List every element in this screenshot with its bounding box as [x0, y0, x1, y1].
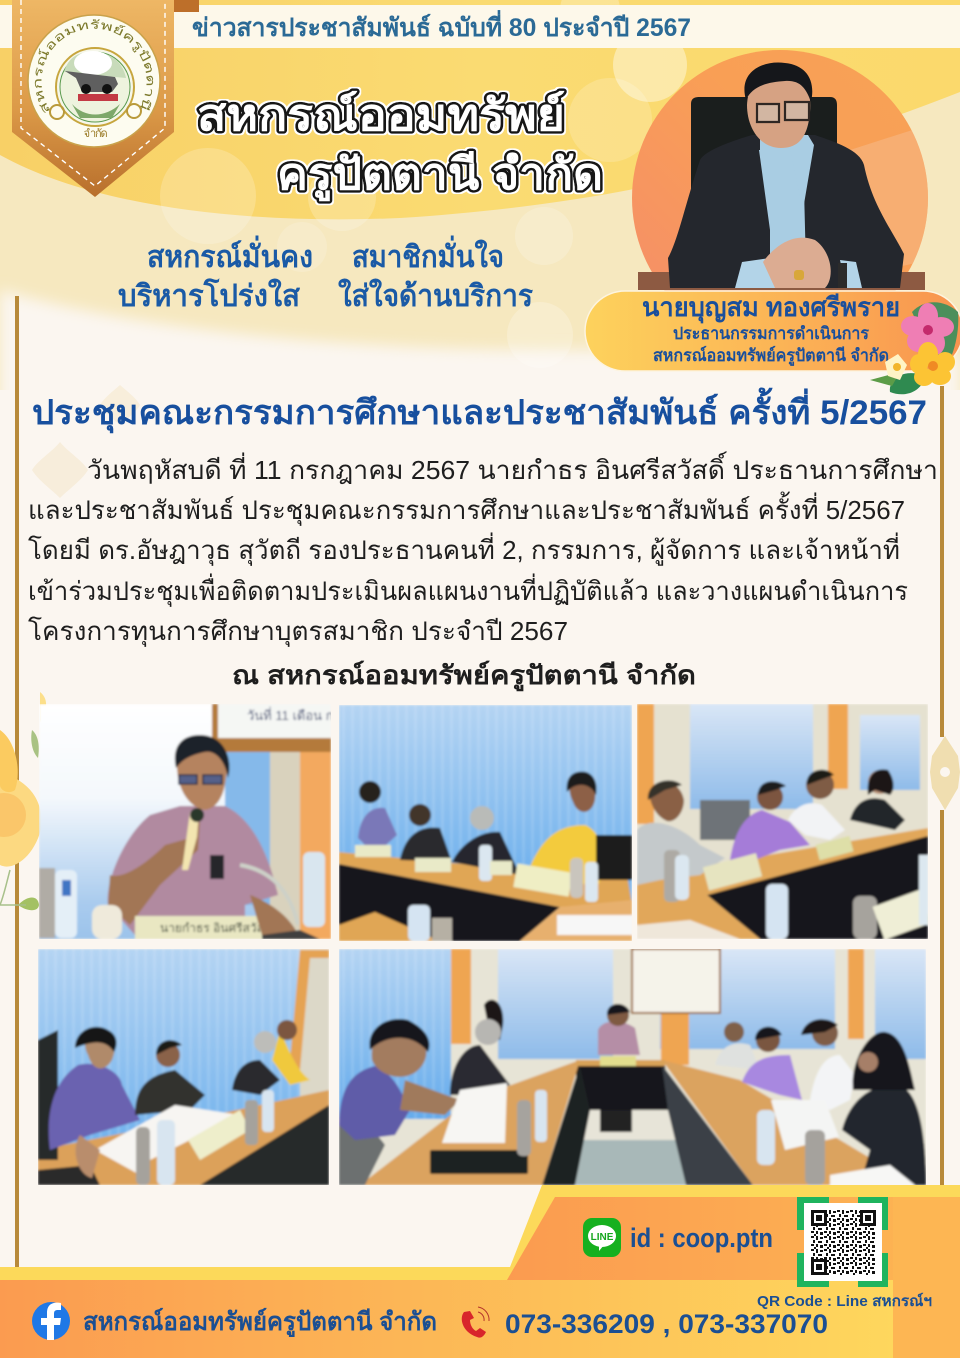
footer: yellow and orange background [0, 1185, 960, 1358]
photo 1: speaker with microphone [39, 704, 341, 939]
slogans [118, 235, 533, 313]
photo 1: speaker with microphone: วันที่ 11 เดือน กร [247, 707, 341, 723]
title: cooperative name: ครูปัตตานี จำกัด [277, 150, 603, 201]
QR caption: QR Code : Line สหกรณ์ฯ [757, 1292, 932, 1310]
body paragraph: เข้าร่วมประชุมเพื่อติดตามประเมินผลแผนงานที่ปฏิบัติแล้ว และวางแผนดำเนินการ [28, 573, 908, 607]
icon: LINE app: LINE [591, 1232, 614, 1243]
chairman name plate [585, 291, 960, 371]
chairman name plate: สหกรณ์ออมทรัพย์ครูปัตตานี จำกัด [653, 345, 889, 367]
photo 4: members reading documents [38, 949, 329, 1185]
slogans: ใส่ใจด้านบริการ [338, 278, 533, 313]
telephone numbers: 073-336209 , 073-337070 [505, 1309, 828, 1339]
icon: Facebook [32, 1302, 70, 1340]
icon: LINE app [583, 1218, 621, 1257]
photo 3: committee members at table right [637, 704, 932, 940]
chairman portrait [632, 50, 928, 290]
title: cooperative name [197, 90, 603, 201]
slogans: สมาชิกมั่นใจ [352, 235, 504, 274]
ribbon with cooperative logo [12, 0, 199, 197]
chairman name plate: นายบุญสม ทองศรีพราย [642, 292, 900, 324]
slogans: สหกรณ์มั่นคง [147, 235, 313, 274]
LINE id: id : coop.ptn [630, 1223, 773, 1253]
heading: meeting title: ประชุมคณะกรรมการศึกษาและประชาสัมพันธ์ ครั้งที่ 5/2567 [32, 387, 927, 434]
decoration: gold ornament right [930, 736, 960, 810]
slogans: บริหารโปร่งใส [118, 277, 301, 313]
decoration: yellow flower and leaves left [0, 692, 46, 910]
right frame line [940, 386, 944, 1267]
body paragraph: โครงการทุนการศึกษาบุตรสมาชิก ประจำปี 2567 [28, 616, 568, 647]
photo 2: committee members at table [339, 705, 632, 941]
body paragraph [28, 451, 938, 692]
top band: newsletter issue: ข่าวสารประชาสัมพันธ์ ฉบับที่ 80 ประจำปี 2567 [192, 10, 691, 42]
logo seal [27, 14, 161, 148]
logo seal: สหกรณ์ออมทรัพย์ครูปัตตานี [34, 19, 154, 113]
body paragraph: และประชาสัมพันธ์ ประชุมคณะกรรมการศึกษาและประชาสัมพันธ์ ครั้งที่ 5/2567 [28, 491, 905, 526]
chairman name plate: ประธานกรรมการดำเนินการ [673, 324, 870, 343]
body paragraph: โดยมี ดร.อัษฎาวุธ สุวัตถี รองประธานคนที่ 2, กรรมการ, ผู้จัดการ และเจ้าหน้าที่ [28, 532, 900, 566]
QR code [797, 1197, 888, 1287]
photo 5: full meeting room with U-shaped table [339, 949, 926, 1185]
photo 1: speaker with microphone: นายกำธร อินศรีสวัสดิ์ [160, 919, 273, 935]
body paragraph: ณ สหกรณ์ออมทรัพย์ครูปัตตานี จำกัด [232, 660, 696, 692]
body paragraph: วันพฤหัสบดี ที่ 11 กรกฎาคม 2567 นายกำธร อินศรีสวัสดิ์ ประธานการศึกษา [87, 451, 938, 485]
left frame line [15, 296, 19, 1267]
icon: tropical flowers [870, 302, 958, 394]
logo seal: จำกัด [84, 128, 108, 140]
top band: newsletter issue [0, 5, 960, 48]
Facebook page name: สหกรณ์ออมทรัพย์ครูปัตตานี จำกัด [83, 1307, 437, 1338]
icon: telephone [462, 1307, 489, 1338]
title: cooperative name: สหกรณ์ออมทรัพย์ [197, 90, 565, 140]
